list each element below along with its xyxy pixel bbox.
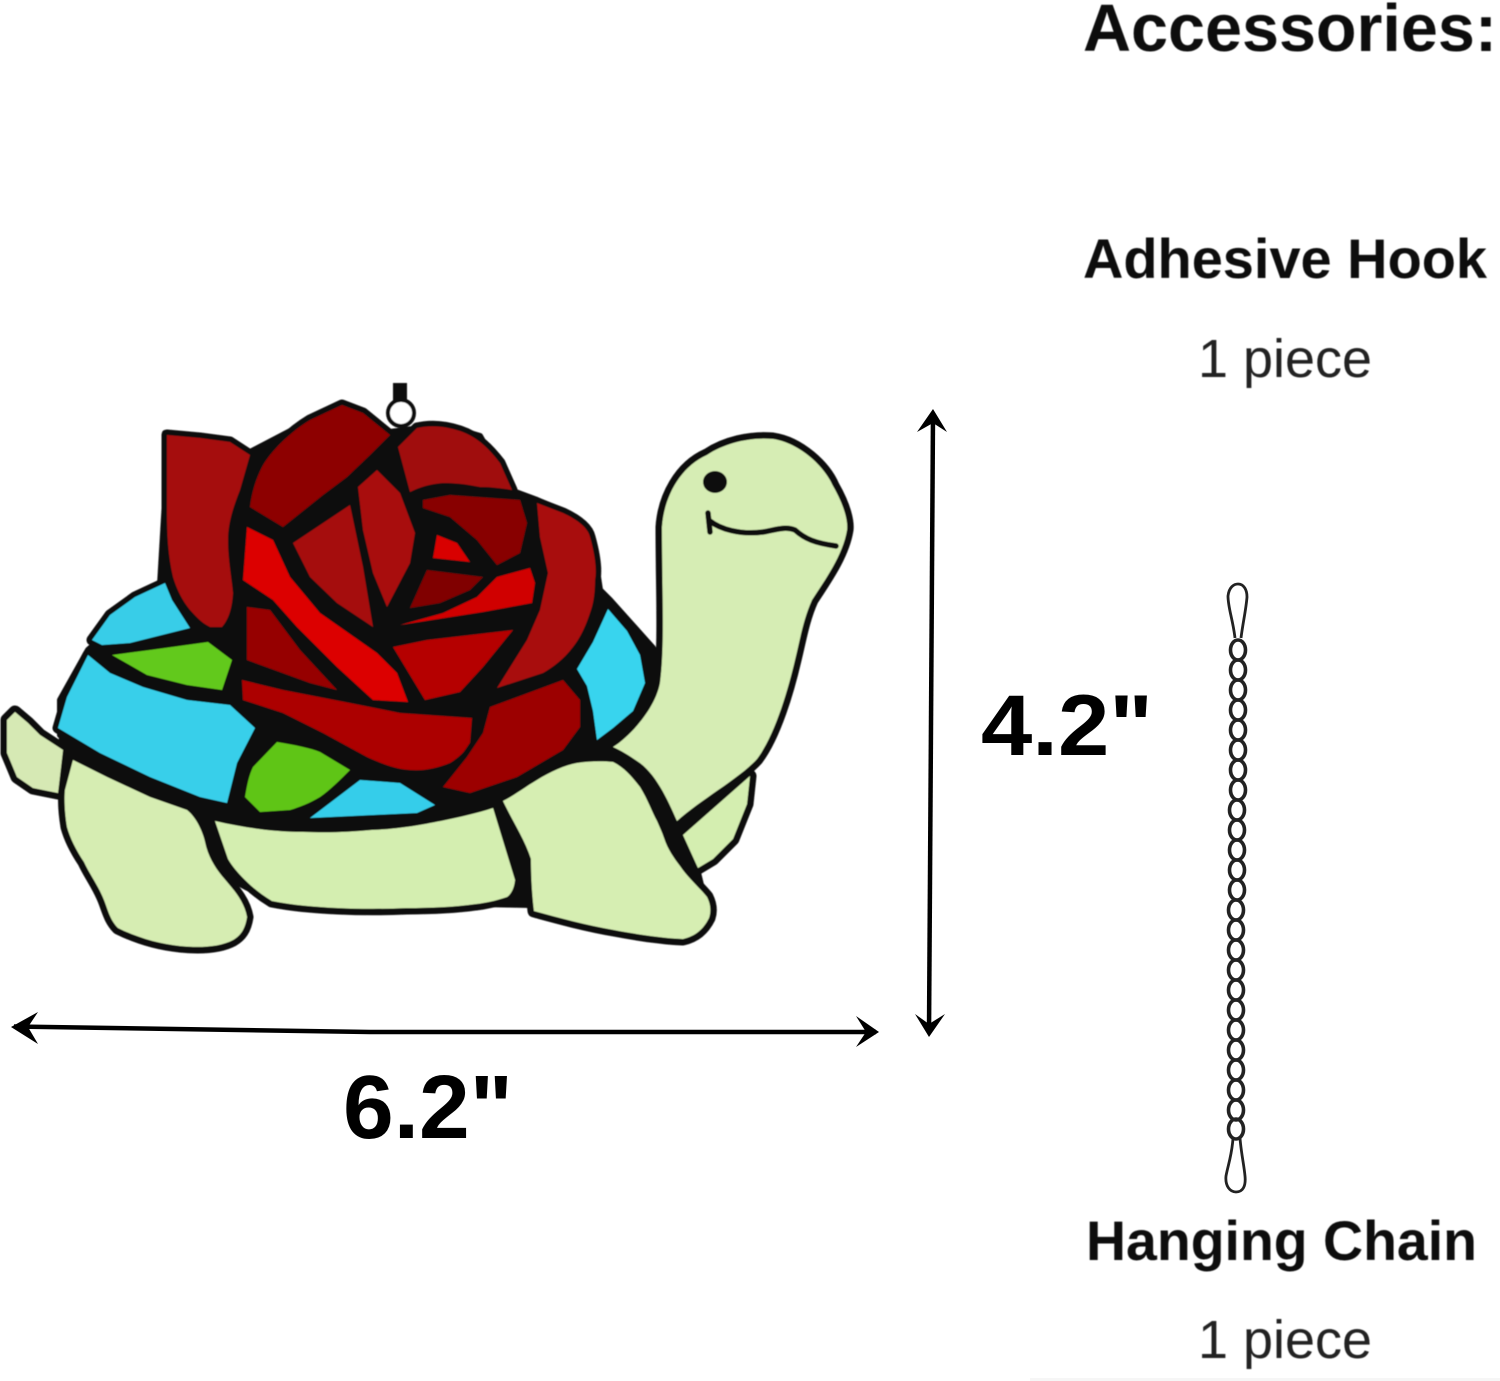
petal: lower left dark — [247, 607, 337, 690]
hanging chain quantity: 1 piece — [1198, 1310, 1372, 1370]
petal: centre bright — [433, 535, 470, 562]
petal: top left — [250, 405, 390, 527]
stained glass rose turtle — [7, 383, 847, 947]
shell: blue panel right — [577, 609, 645, 740]
tail — [7, 712, 63, 793]
petal: lower centre — [393, 630, 513, 700]
shell: blue panel upper left — [92, 583, 190, 645]
leaf lower — [245, 742, 350, 812]
height label: 4.2" — [981, 678, 1153, 774]
petal: centre dark — [410, 570, 483, 608]
vertical dimension arrow — [915, 409, 947, 1037]
petal: long bright — [243, 527, 408, 702]
lead backing lower body — [58, 725, 757, 908]
petal: right outer — [497, 503, 596, 688]
shell: blue band — [58, 655, 255, 803]
leaf upper — [112, 642, 232, 690]
petal: right crescent bright — [400, 568, 535, 625]
adhesive hook quantity: 1 piece — [1198, 329, 1372, 389]
hanging loop — [388, 383, 414, 426]
rear foot behind front leg — [683, 776, 750, 868]
eye — [703, 471, 727, 493]
front leg — [503, 761, 710, 939]
petal: bottom band — [242, 680, 472, 770]
horizontal dimension arrow — [11, 1012, 879, 1047]
petal: back left — [167, 435, 250, 627]
hanging chain — [1226, 584, 1247, 1192]
petal: inner left — [293, 505, 373, 627]
top clasp — [1228, 584, 1247, 638]
chain links — [1228, 640, 1246, 1139]
hanging chain label: Hanging Chain — [1086, 1209, 1477, 1272]
back leg — [65, 760, 247, 947]
petal: inner middle — [358, 470, 415, 607]
head and neck — [613, 439, 847, 821]
rose — [167, 405, 596, 793]
width label: 6.2" — [343, 1058, 513, 1158]
petal: bottom right — [443, 680, 580, 793]
petal: top right — [398, 426, 512, 492]
adhesive hook label: Adhesive Hook — [1083, 227, 1488, 290]
smile — [708, 513, 836, 546]
belly — [215, 808, 515, 909]
shell: blue panel bottom — [310, 780, 435, 818]
petal: inner top right dark — [423, 495, 527, 565]
bottom clasp — [1226, 1138, 1245, 1192]
lead backing silhouette — [60, 404, 664, 825]
